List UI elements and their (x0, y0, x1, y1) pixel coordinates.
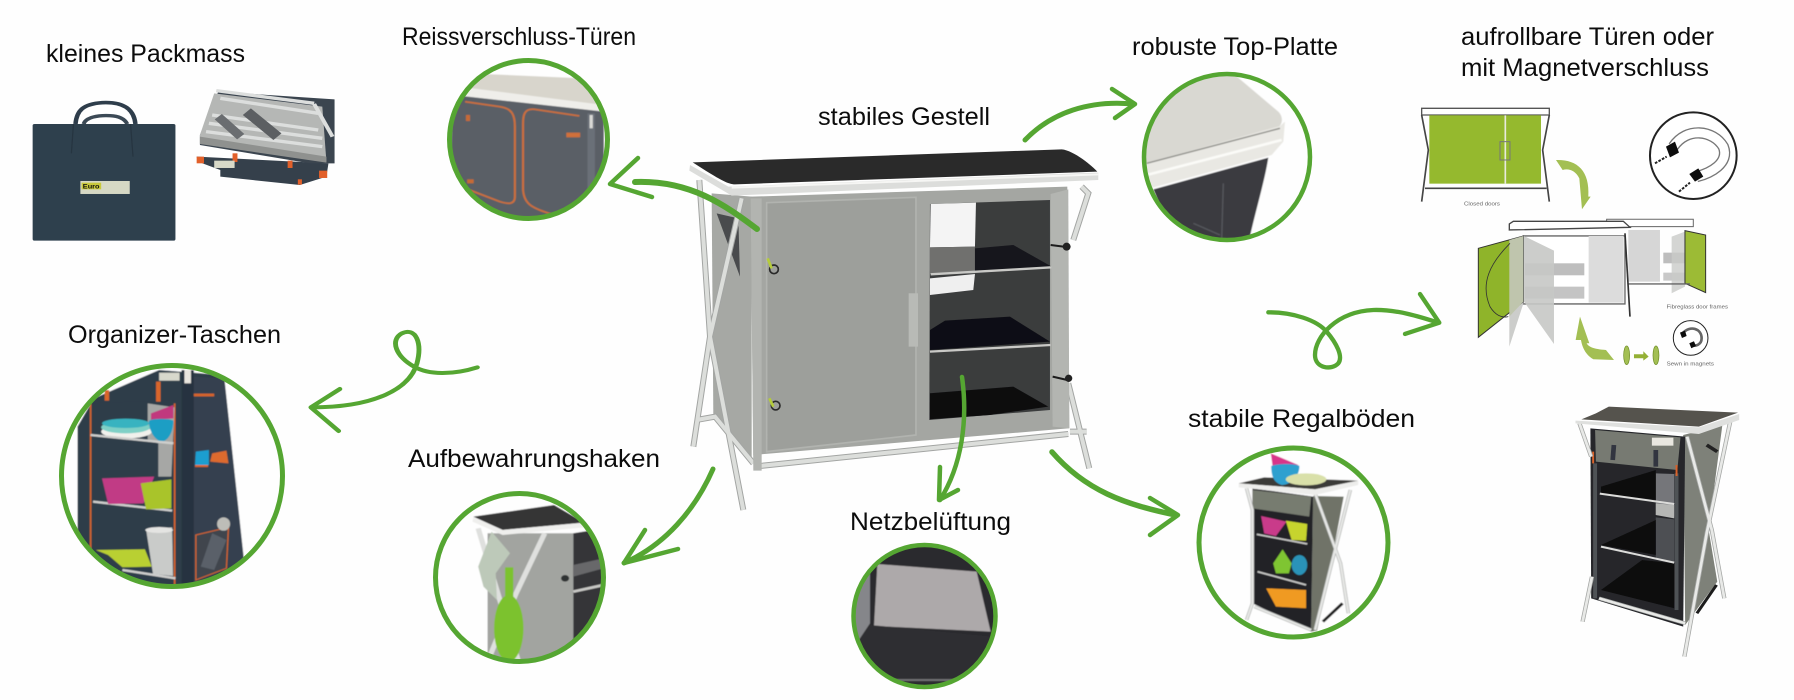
cabinet side panel (712, 193, 752, 458)
arrow: to robuste Top-Platte (1025, 89, 1135, 140)
callout circle: stabile Regalböden (1196, 443, 1391, 642)
curved arrow up (1576, 317, 1614, 360)
callout circle: Netzbelüftung (850, 543, 998, 690)
closed doors drawing (1422, 108, 1549, 207)
photo: packed carry bag (33, 103, 175, 241)
rolled door (1051, 189, 1069, 428)
plates and bowls (101, 405, 173, 442)
icon: magnet large (1650, 112, 1737, 199)
heading: stabile Regalböden: stabile Regalböden (1188, 405, 1415, 433)
cabinet frame legs (693, 180, 1089, 510)
heading: aufrollbare Türen oder mit Magnetverschluss: aufrollbare Türen oder (1461, 23, 1714, 51)
arrow: to Netzbelüftung (939, 377, 964, 500)
heading: Reissverschluss-Türen: Reissverschluss-Türen (402, 23, 636, 51)
side pockets (195, 450, 230, 580)
callout circle: Reissverschluss-Türen (445, 57, 612, 223)
door clips (770, 265, 780, 410)
baskets (102, 477, 171, 509)
back open cabinet (1607, 219, 1706, 293)
diagram: door options with magnets (1422, 108, 1737, 368)
callout circle: Organizer-Taschen (57, 362, 290, 592)
arrow: to Aufbewahrungshaken (624, 469, 713, 563)
heading: kleines Packmass: kleines Packmass (46, 40, 245, 68)
front open cabinet (1478, 221, 1630, 347)
callout circle: robuste Top-Platte (1140, 67, 1313, 245)
caption: sewn in magnets: Sewn in magnets (1667, 362, 1714, 368)
caption: fibreglass door frames: Fibreglass door frames (1667, 304, 1728, 310)
cabinet shelves (929, 200, 1052, 420)
heading: Aufbewahrungshaken: Aufbewahrungshaken (408, 445, 660, 473)
curved arrow down (1556, 160, 1591, 209)
cabinet body (751, 187, 1069, 455)
caption: closed doors: Closed doors (1464, 201, 1500, 207)
icon: sewn-in magnets (1624, 321, 1708, 365)
photo: narrow single-door cabinet (1576, 407, 1739, 657)
heading: Organizer-Taschen: Organizer-Taschen (68, 321, 281, 349)
items on the shelves (1261, 453, 1326, 608)
arrow: to door diagram (1268, 294, 1439, 367)
main product photo: folding cabinet (689, 149, 1098, 510)
oven glove (478, 532, 510, 600)
bucket and dustpan (96, 527, 173, 576)
cabinet door (767, 197, 916, 452)
table top (689, 165, 1098, 196)
photo: packed carry bag: Euro (83, 184, 100, 190)
arrow: to Reissverschluss-Türen (610, 158, 757, 229)
heading: Netzbelüftung: Netzbelüftung (850, 508, 1011, 536)
arrow: to stabile Regalböden (1052, 452, 1178, 535)
photo: folded frame and table (197, 91, 335, 185)
arrow: to Organizer-Taschen (311, 332, 477, 431)
heading: stabiles Gestell: stabiles Gestell (818, 103, 990, 131)
callout circle: Aufbewahrungshaken (430, 490, 610, 667)
heading: aufrollbare Türen oder mit Magnetverschluss: mit Magnetverschluss (1461, 54, 1709, 82)
green racket (494, 567, 523, 662)
heading: robuste Top-Platte: robuste Top-Platte (1132, 33, 1338, 61)
